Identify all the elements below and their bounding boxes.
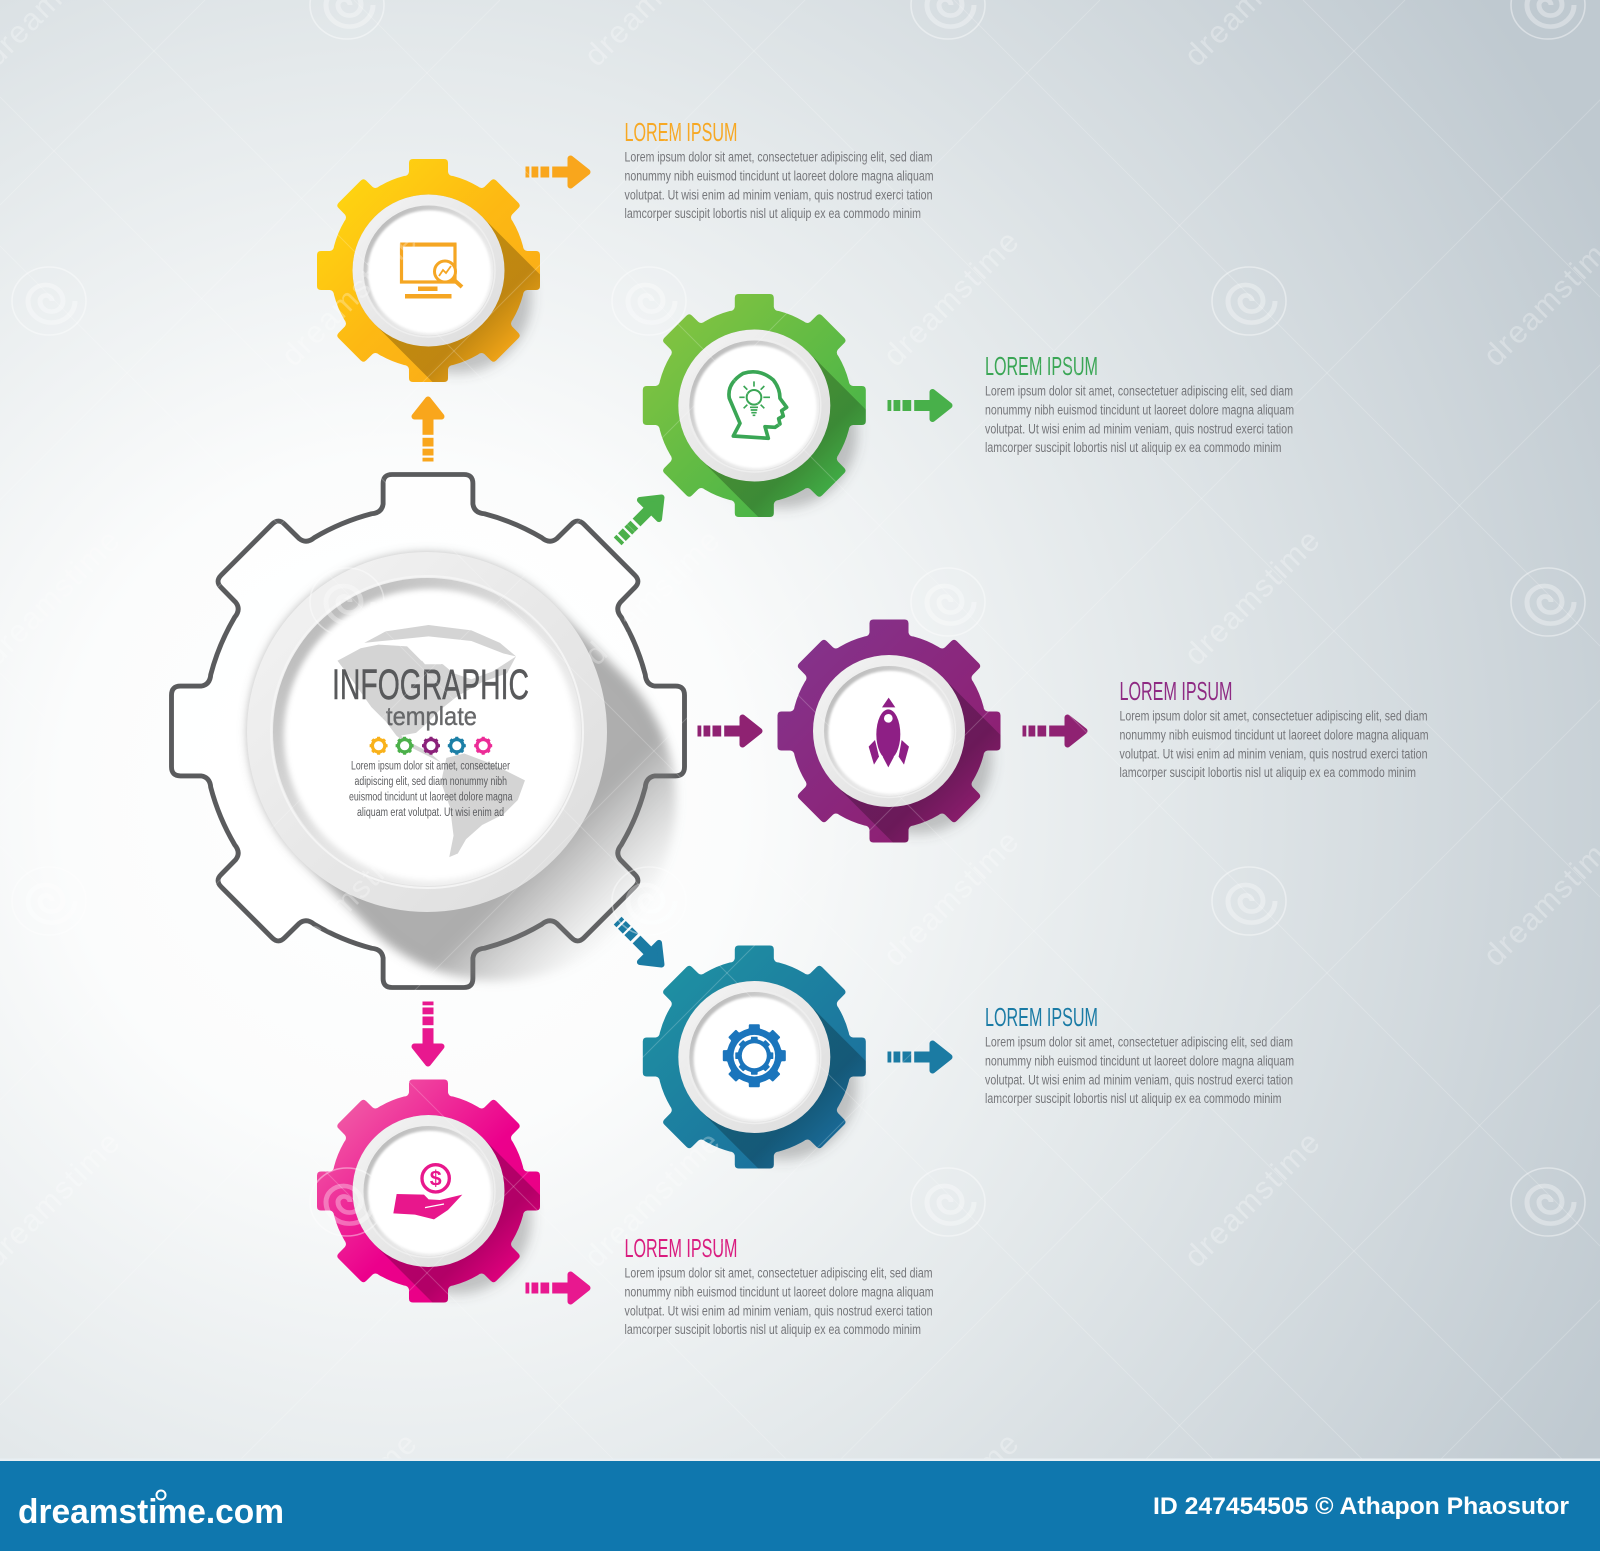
text block: teal: LOREM IPSUM [985, 1002, 1098, 1032]
icon: rocket [869, 698, 909, 767]
icon: cog [723, 1024, 786, 1087]
central body text: euismod tincidunt ut laoreet dolore magna [349, 792, 513, 804]
step: teal gear [643, 946, 866, 1168]
text block: green [985, 351, 1294, 455]
text block: yellow: volutpat. Ut wisi enim ad minim veniam, quis nostrud exerci tation [624, 188, 932, 202]
icon: head with light bulb [729, 372, 787, 438]
text block: purple: Lorem ipsum dolor sit amet, consectetuer adipiscing elit, sed diam [1120, 708, 1428, 724]
arrow: center to yellow [414, 400, 442, 461]
text block: yellow: Lorem ipsum dolor sit amet, consectetuer adipiscing elit, sed diam [624, 150, 932, 164]
text block: teal: lamcorper suscipit lobortis nisl ut aliquip ex ea commodo minim [985, 1091, 1282, 1106]
text block: pink: lamcorper suscipit lobortis nisl ut aliquip ex ea commodo minim [624, 1322, 921, 1337]
text block: teal: volutpat. Ut wisi enim ad minim veniam, quis nostrud exerci tation [985, 1072, 1293, 1088]
step: purple gear [778, 620, 1000, 842]
text block: purple: volutpat. Ut wisi enim ad minim veniam, quis nostrud exerci tation [1120, 746, 1428, 762]
watermark overlay: dreamstime [876, 824, 1025, 973]
step: green gear [643, 294, 866, 517]
arrow: pink output [526, 1274, 588, 1302]
central body text [349, 760, 513, 819]
footer credit: ID 247454505 © Athapon Phaosutor [1153, 1493, 1569, 1520]
world map [337, 625, 525, 857]
footer logo: dreamstime.com [18, 1493, 284, 1531]
text block: green: volutpat. Ut wisi enim ad minim veniam, quis nostrud exerci tation [985, 422, 1293, 436]
central long shadow [427, 732, 497, 802]
central gear outline [172, 474, 684, 988]
icon: hand with coin: $ [430, 1167, 442, 1191]
text block: teal: Lorem ipsum dolor sit amet, consectetuer adipiscing elit, sed diam [985, 1034, 1293, 1050]
watermark overlay: dreamstime [577, 523, 726, 672]
central body text: Lorem ipsum dolor sit amet, consectetuer [351, 760, 510, 772]
text block: pink: LOREM IPSUM [624, 1233, 738, 1263]
watermark overlay: dreamstime [577, 1125, 726, 1274]
text block: pink [624, 1233, 934, 1337]
text block: yellow [624, 117, 934, 221]
arrow: center to pink [414, 1002, 442, 1064]
text block: yellow: lamcorper suscipit lobortis nisl ut aliquip ex ea commodo minim [624, 206, 921, 221]
text block: purple [1120, 676, 1428, 780]
text block: yellow: LOREM IPSUM [624, 117, 738, 147]
central body text: adipiscing elit, sed diam nonummy nibh [354, 776, 507, 788]
arrow: purple output [1023, 718, 1084, 744]
text block: pink: Lorem ipsum dolor sit amet, consectetuer adipiscing elit, sed diam [624, 1266, 932, 1280]
text block: teal [985, 1002, 1294, 1106]
central ring [247, 552, 607, 912]
footer bar [0, 1458, 1600, 1551]
central body text: aliquam erat volutpat. Ut wisi enim ad [357, 807, 504, 819]
footer logo spiral [156, 1490, 166, 1500]
step: yellow gear [317, 159, 540, 382]
text block: purple: lamcorper suscipit lobortis nisl ut aliquip ex ea commodo minim [1120, 765, 1416, 780]
central title: INFOGRAPHIC [332, 661, 529, 709]
arrow: center to purple [698, 718, 760, 744]
text block: green: lamcorper suscipit lobortis nisl ut aliquip ex ea commodo minim [985, 440, 1282, 455]
icon: monitor with magnifier [400, 242, 462, 298]
watermark overlay: dreamstime [274, 224, 423, 373]
arrow: green output [888, 392, 950, 419]
watermark overlay: dreamstime [876, 224, 1025, 373]
text block: pink: nonummy nibh euismod tincidunt ut laoreet dolore magna aliquam [624, 1284, 934, 1300]
watermark overlay: dreamstime [1177, 1125, 1326, 1274]
text block: green: LOREM IPSUM [985, 351, 1098, 381]
arrow: center to green [608, 488, 671, 551]
central gear with ring [172, 474, 684, 988]
arrow: center to teal [608, 911, 671, 974]
icon: hand with coin [393, 1165, 462, 1219]
arrow: yellow output [526, 158, 588, 186]
text block: green: nonummy nibh euismod tincidunt ut laoreet dolore magna aliquam [985, 402, 1294, 418]
text block: purple: nonummy nibh euismod tincidunt ut laoreet dolore magna aliquam [1120, 728, 1428, 742]
watermark overlay: dreamstime [274, 824, 423, 973]
text block: purple: LOREM IPSUM [1120, 676, 1232, 706]
text block: pink: volutpat. Ut wisi enim ad minim veniam, quis nostrud exerci tation [624, 1304, 932, 1318]
text block: yellow: nonummy nibh euismod tincidunt ut laoreet dolore magna aliquam [624, 168, 934, 184]
arrow: teal output [888, 1044, 950, 1070]
mini gears row [370, 737, 492, 755]
text block: teal: nonummy nibh euismod tincidunt ut laoreet dolore magna aliquam [985, 1054, 1294, 1068]
watermark overlay: dreamstime [1177, 523, 1326, 672]
step: pink gear [317, 1080, 540, 1302]
central subtitle: template [386, 701, 477, 731]
text block: green: Lorem ipsum dolor sit amet, consectetuer adipiscing elit, sed diam [985, 384, 1293, 398]
